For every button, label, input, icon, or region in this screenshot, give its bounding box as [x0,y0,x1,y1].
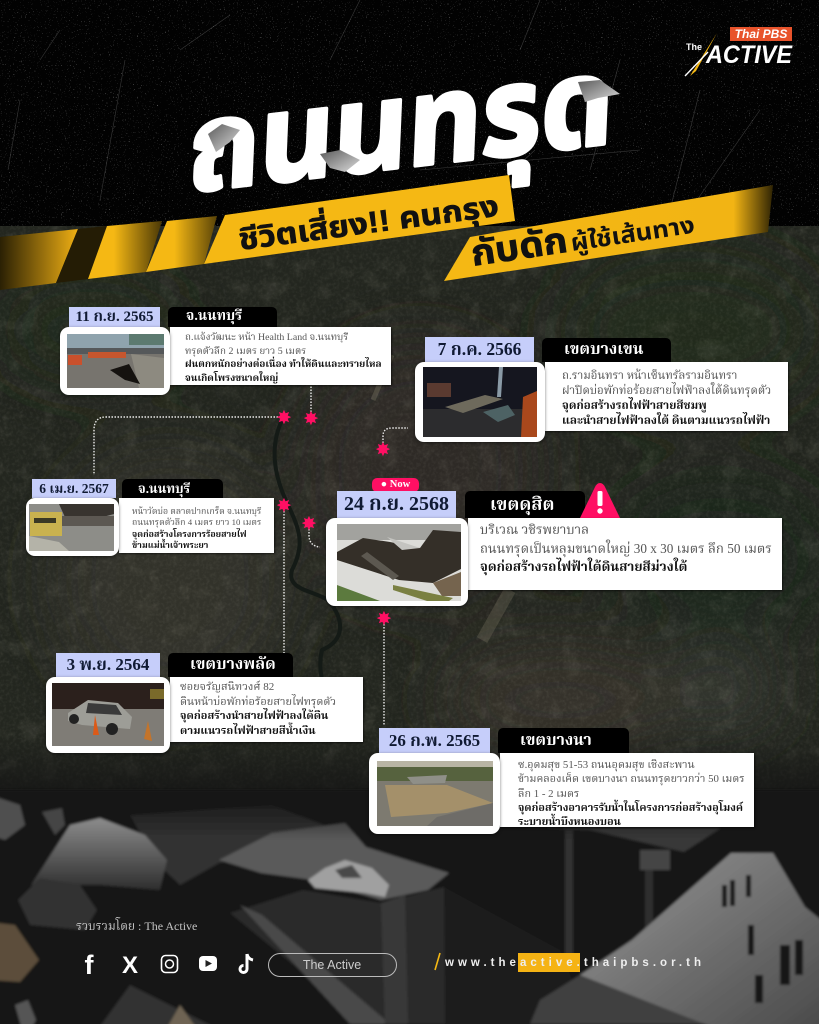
area label [465,491,585,518]
logo: Thai PBS The Active [685,27,793,76]
footer: social icons: f [84,950,94,980]
description: จุดก่อสร้างรถไฟฟ้าใต้ดินสายสีม่วงใต้ [480,559,687,574]
area label: จ.นนทบุรี [138,481,190,496]
date: 3 พ.ย. 2564 [67,655,149,674]
now badge: ● Now [381,479,410,490]
now badge [372,478,419,492]
description: ข้ามแม่น้ำเจ้าพระยา [132,540,208,550]
footer: The Active pill: The Active [303,958,361,972]
description [119,498,274,553]
date [32,479,116,498]
description [500,753,754,827]
description: ดินหน้าบ่อพักท่อร้อยสายไฟทรุดตัว [180,696,336,708]
card: 3 Nov 2564 Bang Phlat [45,653,365,754]
description: ถ.รามอินทรา หน้าเซ็นทรัลรามอินทรา [562,370,737,382]
description: ลึก 1 - 2 เมตร [518,788,579,800]
headline bar 2: กับดัก [468,219,570,274]
description: จุดก่อสร้างนำสายไฟฟ้าลงใต้ดิน [180,710,328,722]
date [56,653,160,677]
title: ถนนทรุด [186,32,617,224]
description: หน้าวัดบ่อ ตลาดปากเกร็ด จ.นนทบุรี [132,506,261,516]
description: จนเกิดโพรงขนาดใหญ่ [185,372,278,384]
card: 24 Sep 2568 Dusit [325,478,784,608]
description: จุดก่อสร้างรถไฟฟ้าสายสีชมพู [562,400,707,412]
background: black scratched header [0,0,819,227]
description: ทรุดตัวลึก 2 เมตร ยาว 5 เมตร [185,346,306,356]
card: 7 Jul 2566 Bang Khen [414,337,790,444]
description: ถนนทรุดตัวลึก 4 เมตร ยาว 10 เมตร [132,517,261,527]
map markers: pink stars [276,407,392,630]
date: 24 ก.ย. 2568 [344,493,449,515]
background: collapsed road photo [0,790,819,1024]
area label [168,653,293,677]
description: ตามแนวรถไฟฟ้าสายสีน้ำเงิน [180,725,316,737]
photo [46,677,170,753]
description: ข้ามคลองเค็ด เขตบางนา ถนนทรุดยาวกว่า 50 เมตร [518,773,745,785]
map markers: pink stars: ✸ [303,408,319,430]
description: และนำสายไฟฟ้าลงใต้ ดินตามแนวรถไฟฟ้า [562,415,770,427]
photo [60,327,170,395]
description: บริเวณ วชิรพยาบาล [480,522,589,537]
date [425,337,534,362]
logo: Thai PBS The Active: The [686,42,702,52]
description: ถ.แจ้งวัฒนะ หน้า Health Land จ.นนทบุรี [185,332,348,343]
photo [26,498,119,556]
description: ซ.อุดมสุข 51-53 ถนนอุดมสุข เชิงสะพาน [518,759,695,771]
headline bar 1: ชีวิตเสี่ยง!! คนกรุง [236,184,501,258]
card: 26 Feb 2565 Bang Na [369,728,756,834]
description [545,362,788,431]
description: จุดก่อสร้างโครงการร้อยสายไฟ [132,529,247,539]
description: ฝนตกหนักอย่างต่อเนื่อง ทำให้ดินและทรายไหล [185,359,382,370]
date: 7 ก.ค. 2566 [438,339,521,359]
area label: เขตบางเขน [564,341,643,358]
description [170,677,363,742]
footer: The Active pill [268,954,396,976]
map markers: pink stars: ✸ [376,608,392,630]
area label [498,728,629,753]
headline bar 1 [204,175,515,264]
description [468,518,782,590]
area label [122,479,223,498]
description: ถนนทรุดเป็นหลุมขนาดใหญ่ 30 x 30 เมตร ลึก 50 เมตร [480,540,772,556]
area label: เขตบางพลัด [190,656,276,673]
map markers: pink stars: ✸ [276,495,292,517]
footer: social icons: X [122,952,138,979]
map markers: pink stars: ✸ [276,407,292,429]
footer: website address [435,953,701,972]
description [170,327,391,385]
date [379,728,490,753]
photo [415,362,545,442]
background: satellite map [0,226,819,826]
logo: Thai PBS The Active: ACTIVE [705,41,793,69]
warning tape: left striped section [0,216,217,290]
area label [542,338,671,362]
footer: social icons [84,950,253,980]
map markers: pink stars: ✸ [375,439,391,461]
card: 11 Sep 2565 Nonthaburi [59,307,393,397]
date [69,307,160,327]
photo [326,518,468,606]
date: 26 ก.พ. 2565 [389,731,480,750]
headline bar 2: ผู้ใช้เส้นทาง [569,211,697,258]
photo [369,753,500,834]
date: 11 ก.ย. 2565 [76,309,153,325]
description: ฝาปิดบ่อพักท่อร้อยสายไฟฟ้าลงใต้ดินทรุดตัว [562,385,771,397]
footer: website address: www.theactive.thaipbs.or.th [444,957,701,969]
logo: Thai PBS The Active: Thai PBS [735,27,787,41]
card: 6 Apr 2567 Nonthaburi [25,479,276,558]
area label: จ.นนทบุรี [186,309,242,324]
date: 6 เม.ย. 2567 [39,481,109,496]
area label: เขตดุสิต [490,494,554,514]
warning icon [580,483,620,518]
description: จุดก่อสร้างอาคารรับน้ำในโครงการก่อสร้างอุโมงค์ [518,802,743,814]
area label [168,307,277,327]
area label: เขตบางนา [520,732,592,749]
connector lines [94,385,408,725]
footer: credit: รวบรวมโดย : The Active [76,917,197,933]
description: ซอยจรัญสนิทวงศ์ 82 [180,681,274,693]
description: ระบายน้ำบึงหนองบอน [518,816,621,828]
map markers: pink stars: ✸ [301,513,317,535]
headline bar 2 [444,185,773,281]
